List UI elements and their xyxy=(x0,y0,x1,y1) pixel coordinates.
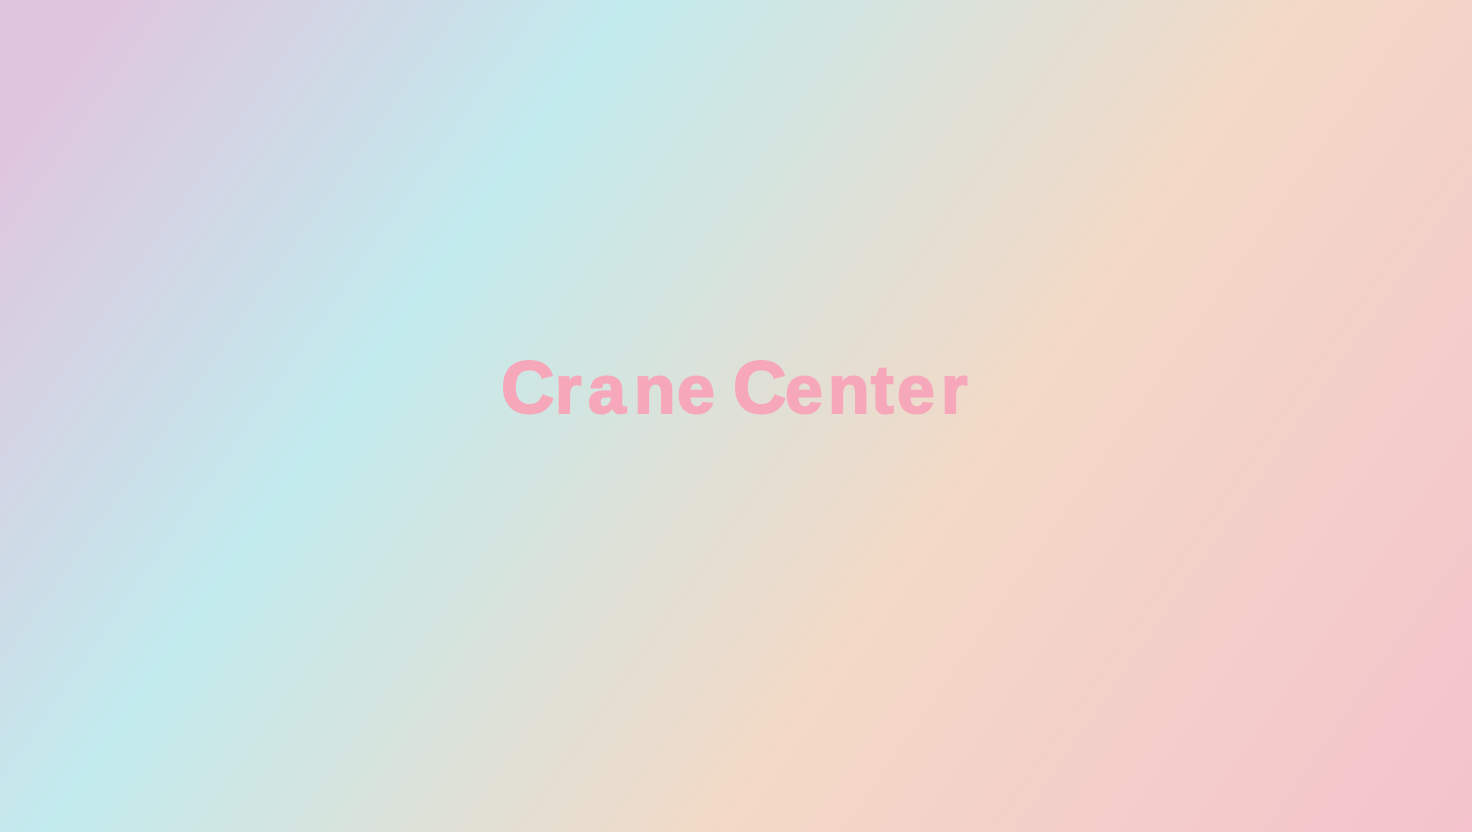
title xyxy=(501,346,968,429)
title: rane xyxy=(555,352,715,428)
title: C xyxy=(501,346,554,429)
title: C xyxy=(733,346,786,429)
title: enter xyxy=(785,352,967,428)
